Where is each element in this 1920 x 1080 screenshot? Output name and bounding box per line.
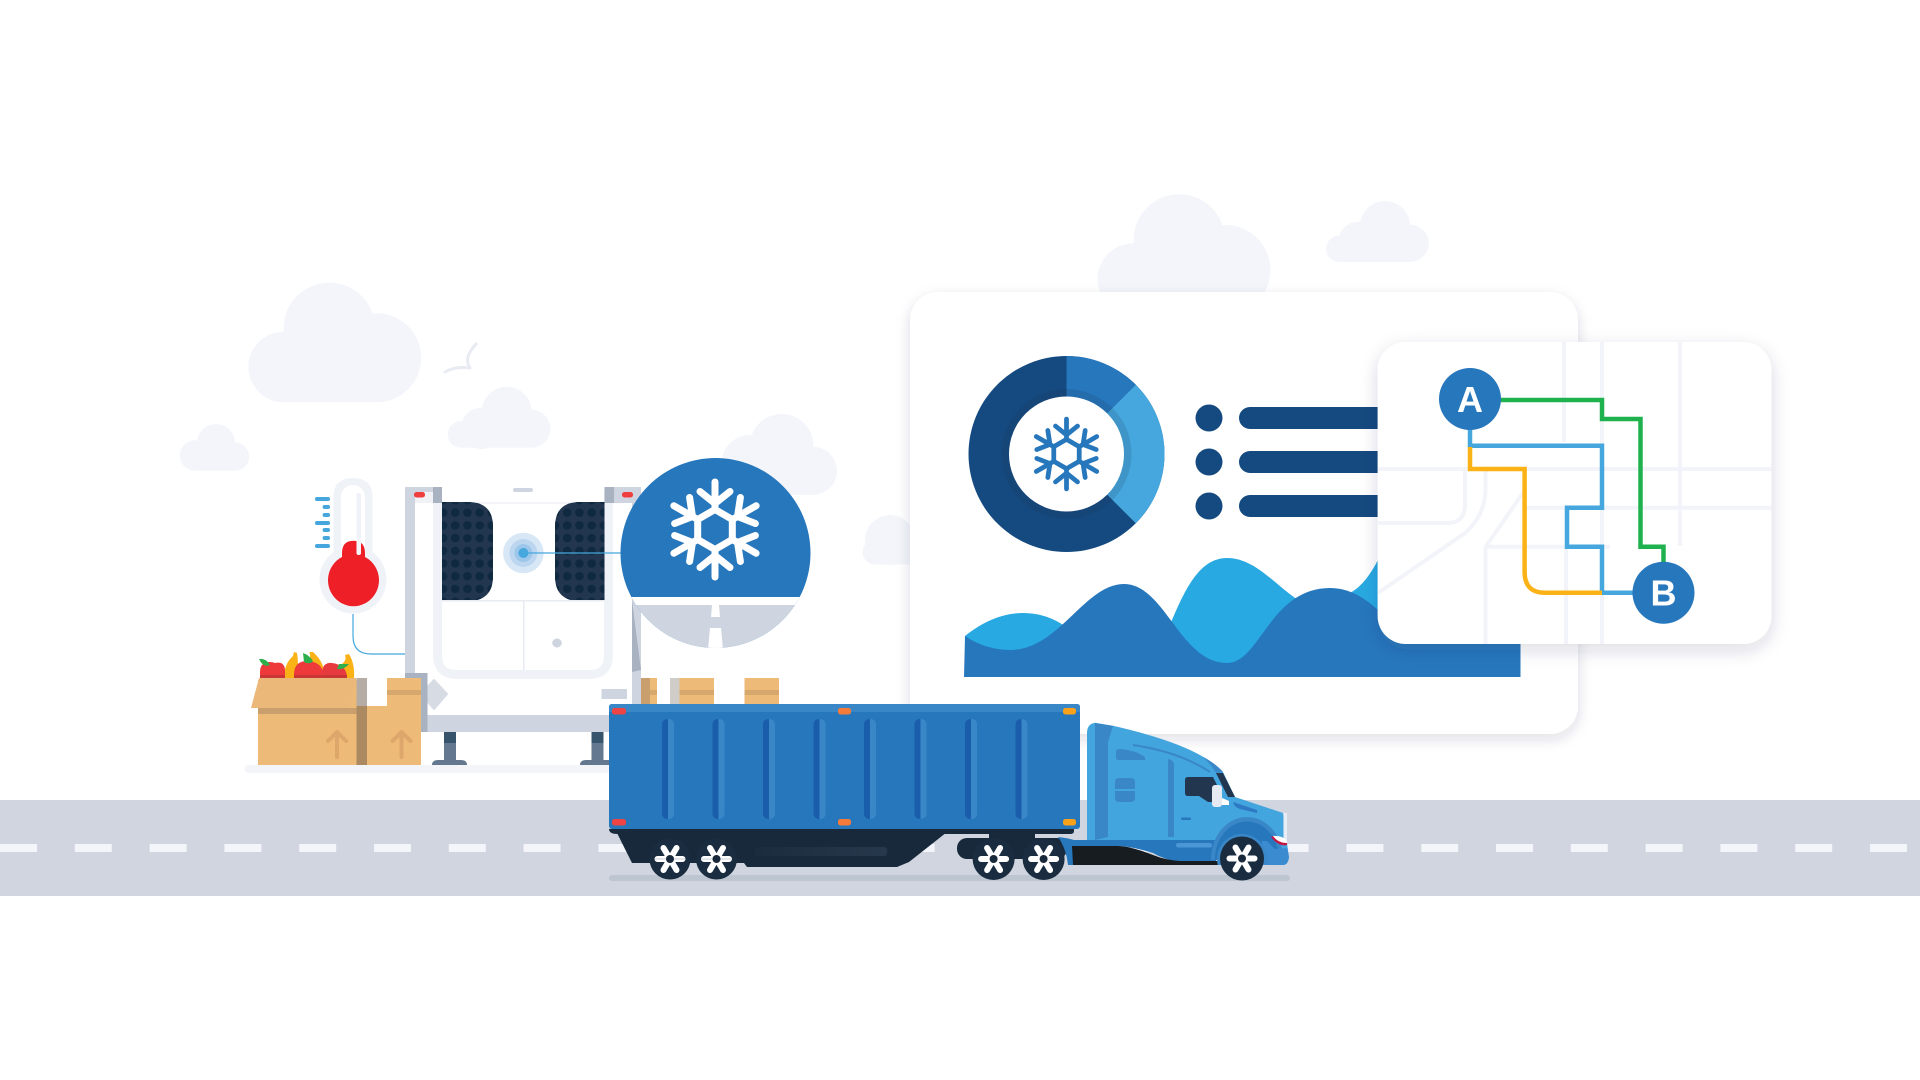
route: green [1500,400,1664,582]
cab [1058,722,1289,865]
route: blue [1470,425,1640,593]
black side skirt [1072,846,1225,865]
wheel: drive 1 [973,838,1015,880]
wheel well [1217,834,1262,865]
hood vent [1233,802,1257,813]
marker B [1632,562,1694,624]
right grille [555,502,604,601]
small plate [602,689,627,699]
sleeper vent [1116,749,1145,760]
left grille [442,502,493,601]
icon: snowflake [665,482,765,577]
wheel arch [1211,817,1282,860]
lane dashes [0,844,1920,852]
nose [1262,841,1289,865]
marker lights [612,708,1076,826]
cloud: small far left [180,424,249,471]
bracket and diamond mount [405,673,447,732]
donut chart [968,356,1165,552]
panel: dashboard [910,292,1578,734]
icon: snowflake [1030,419,1103,489]
undercarriage slot [755,847,887,856]
cloud: behind snow badge [722,414,837,495]
legend list [1196,404,1439,520]
service panel lines [442,600,605,670]
headlight [1271,836,1287,845]
trailer ribs [662,719,1028,819]
truck ground shadow [609,875,1290,881]
wheel: trailer rear 1 [650,838,690,880]
cloud: behind dashboard left [862,515,925,565]
side step [1176,843,1212,848]
cab shell [1087,723,1289,865]
unit frame [405,487,641,732]
marker A [1439,368,1501,430]
route: yellow [1470,447,1602,593]
banana [284,652,298,678]
sensor pulse [503,533,625,573]
mercury bulb [328,541,379,606]
cloud: behind dashboard top [1098,194,1270,315]
fuel tank fairing [1058,837,1216,865]
trailer body [609,704,1080,829]
cloud: centre left [448,387,550,449]
cardboard box with tape [356,678,421,765]
door seam [1168,759,1174,837]
cardboard box with open flap [251,678,356,765]
fifth wheel assembly [957,832,1067,859]
windshield [1216,773,1235,797]
side mirror [1212,785,1229,807]
door handle [1181,818,1191,820]
marker B: B [1650,572,1676,614]
panel: route map [1378,342,1772,644]
sleeper window [1115,778,1135,802]
wheel: drive 2 [1023,838,1065,880]
banana [307,652,324,670]
cloud: large left [248,283,421,402]
roof crease [1133,745,1210,772]
icon: up arrow [328,732,346,757]
icon: bird [445,344,476,372]
icon: up arrow [392,732,410,757]
snowflake badge [620,458,810,648]
bumper trim [1284,813,1287,842]
apple [322,663,347,678]
temperature scale [315,497,330,548]
marker A: A [1457,379,1483,420]
road [0,800,1920,896]
unit legs [432,732,610,765]
thermometer casing [319,478,386,614]
fruit [259,652,354,678]
floor line [244,765,644,773]
apple [294,661,323,678]
apple base shade [260,675,347,678]
cloud: top right [1326,201,1429,262]
map streets [1378,342,1772,644]
wheel: trailer rear 2 [696,838,737,880]
wheel: steering [1220,836,1264,880]
side window [1185,777,1217,802]
trailer undercarriage [609,829,1074,867]
cab rear strip [1095,723,1113,840]
area chart [964,520,1520,677]
truck [609,704,1289,880]
stacked boxes right [641,678,779,706]
banana [342,654,354,678]
apple [260,662,285,678]
refrigeration unit [405,487,641,765]
sensor wire [353,614,405,654]
road inside badge [632,597,800,648]
indicator lights [414,492,633,498]
thermometer [315,478,405,654]
leaves [259,653,349,669]
